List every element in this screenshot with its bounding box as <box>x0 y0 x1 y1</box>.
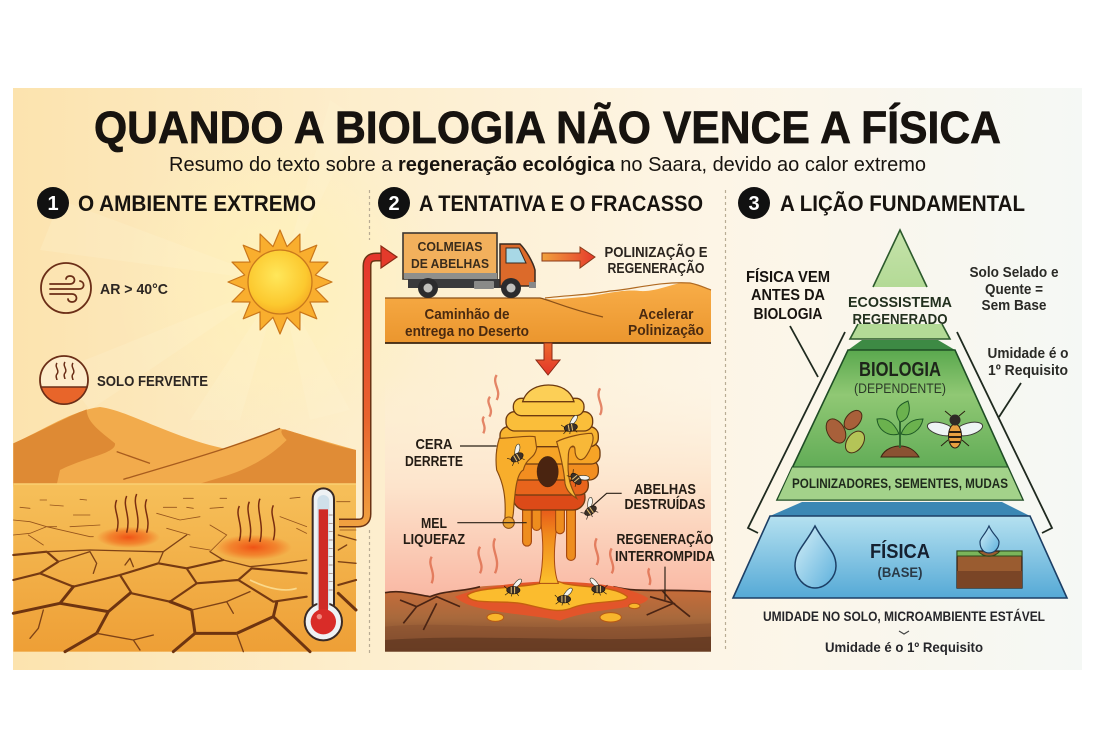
caption: umidade no solo: UMIDADE NO SOLO, MICROAMBIENTE ESTÁVEL <box>763 608 1045 624</box>
honey puddle <box>455 581 648 622</box>
label: mel liquefaz: LIQUEFAZ <box>403 531 465 548</box>
label: umidade <box>988 345 1068 379</box>
cracked soil <box>385 584 711 652</box>
arrow: truck to pollination <box>542 247 595 268</box>
panel: o ambiente extremo <box>13 187 356 652</box>
label: polinização e regeneração: REGENERAÇÃO <box>608 259 705 277</box>
hive entrance <box>537 456 558 487</box>
tier: física: (BASE) <box>878 564 922 580</box>
label: cera derrete <box>405 436 463 470</box>
label: física vem antes da biologia <box>746 267 830 323</box>
title: QUANDO A BIOLOGIA NÃO VENCE A FÍSICA <box>94 102 1001 153</box>
panel: a lição fundamental <box>733 187 1068 655</box>
label: ar: AR > 40°C <box>100 281 168 298</box>
tier: biologia <box>777 340 1023 500</box>
heading 3 <box>738 187 1025 219</box>
tier: biologia: (DEPENDENTE) <box>854 380 946 396</box>
icon: water drop <box>795 526 836 588</box>
label: abelhas destruídas <box>624 481 706 513</box>
arrow: thermometer to truck <box>339 246 397 523</box>
desert band: Acelerar <box>638 306 694 323</box>
label: regeneração interrompida: REGENERAÇÃO <box>616 530 714 548</box>
label: solo selado: Sem Base <box>982 297 1046 314</box>
label: solo selado <box>970 264 1058 314</box>
label: cera derrete: DERRETE <box>405 453 463 470</box>
label: abelhas destruídas: DESTRUÍDAS <box>624 496 706 513</box>
icon: soil with drop <box>957 526 1022 588</box>
icon: truck with hives <box>403 233 536 298</box>
label: abelhas destruídas: ABELHAS <box>634 481 696 498</box>
icon: boiling soil <box>40 356 88 404</box>
heading 2 <box>378 187 703 219</box>
subtitle: Resumo do texto sobre a regeneração ecológica no Saara, devido ao calor extremo <box>169 154 926 176</box>
label: umidade: 1º Requisito <box>988 362 1068 379</box>
label: física vem antes da biologia: FÍSICA VEM <box>746 267 830 286</box>
label: polinização e regeneração <box>604 243 708 277</box>
honey stream <box>527 497 571 583</box>
label: regeneração interrompida: INTERROMPIDA <box>615 548 715 565</box>
heading 2: 2 <box>388 193 400 215</box>
heat waves <box>430 375 650 585</box>
icon: wind <box>41 263 91 313</box>
desert band: Caminhão de <box>424 306 510 323</box>
hive body <box>497 385 600 510</box>
icon: truck with hives: DE ABELHAS <box>411 256 489 271</box>
tier: biologia: BIOLOGIA <box>859 359 941 381</box>
melting wax <box>496 433 593 528</box>
bracket lines <box>748 326 1052 533</box>
label: regeneração interrompida <box>615 530 715 565</box>
label: mel liquefaz <box>403 515 465 548</box>
icon: seeds <box>822 407 868 456</box>
desert band: Polinização <box>628 322 704 339</box>
heading 3: A LIÇÃO FUNDAMENTAL <box>780 191 1025 216</box>
icon: seedling <box>877 401 923 457</box>
leader lines <box>457 446 665 600</box>
tier: ecossistema regenerado: REGENERADO <box>852 311 948 328</box>
heading 1: O AMBIENTE EXTREMO <box>78 191 316 216</box>
heading 3: 3 <box>748 193 760 215</box>
label: cera derrete: CERA <box>416 436 453 453</box>
label: solo selado: Solo Selado e <box>970 264 1058 281</box>
tier: ecossistema regenerado <box>848 230 952 339</box>
icon: thermometer <box>305 488 342 640</box>
desert band: entrega no Deserto <box>405 323 529 340</box>
cracked ground <box>13 483 356 652</box>
bees <box>504 415 607 605</box>
dunes <box>13 407 356 487</box>
tier: ecossistema regenerado: ECOSSISTEMA <box>848 294 952 311</box>
icon: truck with hives: COLMEIAS <box>418 239 483 254</box>
background panel <box>13 88 1082 670</box>
icon: chevron <box>899 631 909 634</box>
heat spots <box>97 494 292 560</box>
heading 1 <box>37 187 316 219</box>
arrow: down to hive <box>536 343 560 375</box>
pyramid <box>733 230 1067 598</box>
label: solo: SOLO FERVENTE <box>97 373 208 390</box>
tier: física <box>733 502 1067 598</box>
heading 1: 1 <box>47 193 59 215</box>
tier: física: FÍSICA <box>870 540 930 563</box>
melting hive scene <box>385 375 711 652</box>
label: física vem antes da biologia: BIOLOGIA <box>754 306 823 323</box>
tier: biologia: POLINIZADORES, SEMENTES, MUDAS <box>792 475 1008 491</box>
label: polinização e regeneração: POLINIZAÇÃO E <box>604 243 708 261</box>
heading 2: A TENTATIVA E O FRACASSO <box>419 191 703 216</box>
panel: a tentativa e o fracasso <box>378 187 715 652</box>
label: umidade: Umidade é o <box>988 345 1068 362</box>
icon: bee <box>926 411 984 448</box>
label: física vem antes da biologia: ANTES DA <box>751 287 825 304</box>
label: mel liquefaz: MEL <box>421 515 447 532</box>
sky <box>385 377 711 597</box>
desert scene <box>13 407 356 652</box>
label: solo selado: Quente = <box>985 281 1043 298</box>
caption: umidade requisito: Umidade é o 1º Requisito <box>825 639 983 655</box>
desert band <box>385 283 711 343</box>
icon: sun <box>228 230 332 334</box>
